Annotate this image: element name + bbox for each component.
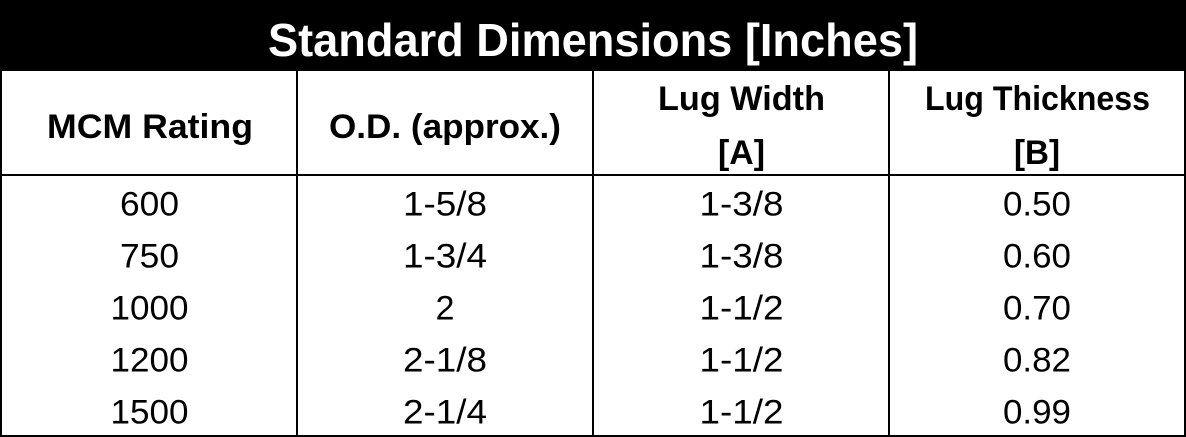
column headers: Lug Width <box>658 80 825 118</box>
column: MCM rating values: 600 <box>120 186 179 224</box>
column: lug width values: 1-3/8 <box>700 186 784 224</box>
column: lug width values: 1-1/2 <box>700 394 784 432</box>
column headers <box>47 80 1150 172</box>
column: lug thickness values <box>1003 186 1071 432</box>
column: lug thickness values: 0.60 <box>1003 238 1071 276</box>
column: outer diameter values: 2-1/8 <box>403 342 487 380</box>
title bar <box>0 0 1186 71</box>
column headers: O.D. (approx.) <box>329 108 561 146</box>
column: outer diameter values: 2-1/4 <box>403 394 487 432</box>
title bar: Standard Dimensions [Inches] <box>268 14 918 66</box>
column: MCM rating values: 750 <box>120 238 179 276</box>
column: lug thickness values: 0.99 <box>1003 394 1071 432</box>
column: lug thickness values: 0.82 <box>1003 342 1071 380</box>
column: lug thickness values: 0.70 <box>1003 290 1071 328</box>
column: lug width values <box>700 186 784 432</box>
column: outer diameter values: 2 <box>436 290 454 328</box>
column: lug thickness values: 0.50 <box>1003 186 1071 224</box>
column headers: MCM Rating <box>47 108 253 146</box>
column: outer diameter values: 1-5/8 <box>403 186 487 224</box>
column: MCM rating values: 1500 <box>110 394 188 432</box>
column: MCM rating values: 1000 <box>110 290 188 328</box>
column: MCM rating values: 1200 <box>110 342 188 380</box>
column: lug width values: 1-1/2 <box>700 290 784 328</box>
column: outer diameter values <box>403 186 487 432</box>
column: outer diameter values: 1-3/4 <box>403 238 487 276</box>
column headers: [B] <box>1014 134 1060 172</box>
column headers: Lug Thickness <box>925 80 1150 118</box>
column headers: [A] <box>718 134 765 172</box>
column: lug width values: 1-3/8 <box>700 238 784 276</box>
column: MCM rating values <box>110 186 188 432</box>
column: lug width values: 1-1/2 <box>700 342 784 380</box>
